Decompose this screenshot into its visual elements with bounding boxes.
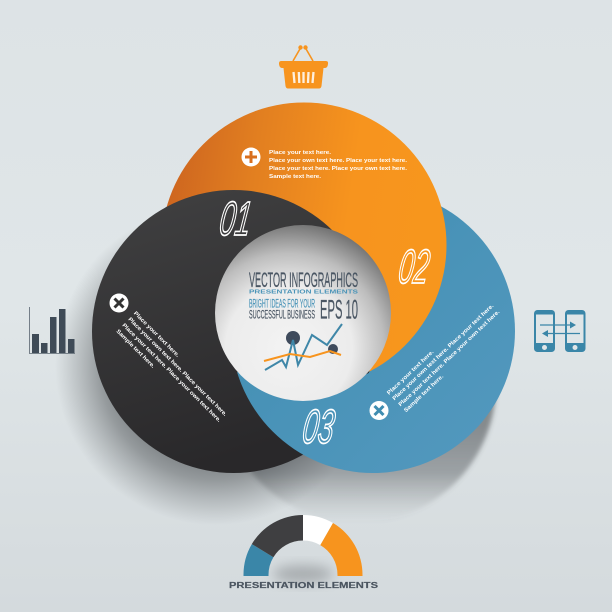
long drop shadows under circles [55, 205, 496, 525]
circle: black 01 base [92, 190, 375, 473]
text: blue panel: Place your text here. [386, 349, 436, 396]
icon: close on black [110, 294, 128, 312]
text: black panel: Place your text here. Place your own text here. [121, 323, 222, 424]
text: black panel: Sample text here. [115, 329, 156, 370]
center line chart [264, 324, 342, 370]
center title block: BRIGHT IDEAS FOR YOUR [249, 298, 315, 310]
text: orange panel: Place your text here. [269, 150, 331, 156]
text: blue panel [386, 303, 502, 414]
text: EPS 10 [320, 294, 358, 324]
center title block: PRESENTATION ELEMENTS [249, 290, 358, 296]
text: blue panel: Place your own text here. Place your text here. [392, 303, 496, 402]
text: black panel: Place your text here. [132, 311, 181, 359]
text: black panel [115, 311, 228, 424]
text: orange panel: Place your text here. Place your own text here. [269, 166, 407, 172]
text: black panel: Place your own text here. Place your text here. [127, 317, 228, 418]
center title block: SUCCESSFUL BUSINESS [249, 310, 315, 322]
icon: plus on orange [242, 148, 260, 166]
text: VECTOR INFOGRAPHICS [249, 269, 358, 292]
semi donut chart [243, 515, 363, 583]
icon: bar chart [30, 307, 75, 354]
numeral 03: 03 [299, 400, 338, 454]
icon: close on blue [370, 401, 388, 420]
center title block [249, 269, 358, 324]
circle: orange 02 [162, 102, 446, 388]
icon: phones with arrows [534, 310, 586, 352]
numeral 02: 02 [395, 240, 433, 294]
text: orange panel: Sample text here. [269, 174, 321, 180]
numeral 01: 01 [216, 192, 255, 246]
circle: blue 03 [231, 189, 515, 473]
text: orange panel: Place your own text here. Place your text here. [269, 158, 407, 164]
text: orange panel [269, 150, 407, 180]
footer label: PRESENTATION ELEMENTS [229, 581, 379, 590]
text: blue panel: Place your text here. Place your own text here. [398, 309, 502, 408]
text: blue panel: Sample text here. [403, 373, 445, 414]
circle: black overlap above orange [162, 190, 370, 374]
center hole [215, 225, 391, 401]
icon: basket [279, 45, 328, 88]
